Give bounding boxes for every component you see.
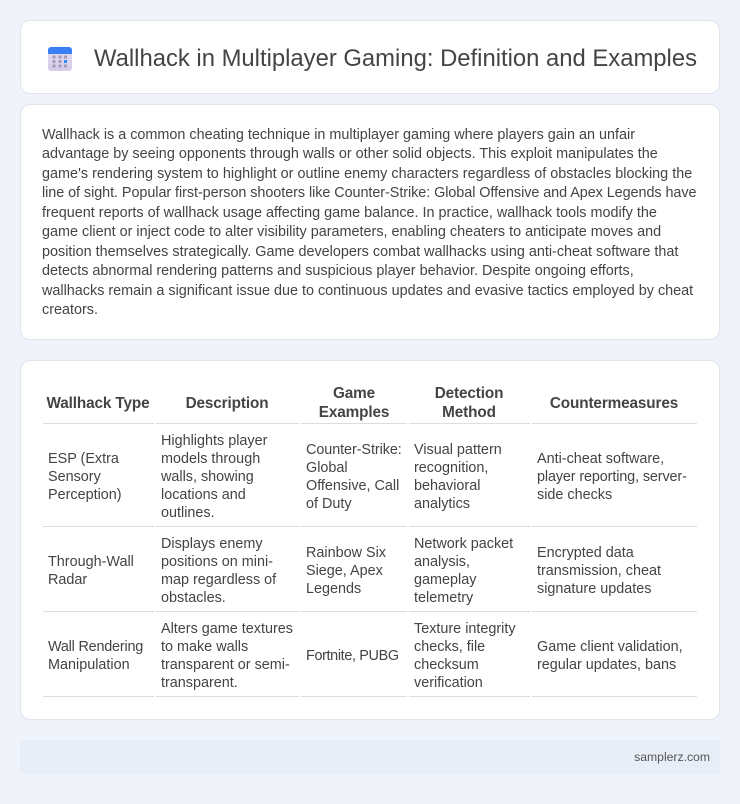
row: Through-Wall Radar: telemetry bbox=[414, 590, 473, 606]
row: Through-Wall Radar: Displays enemy bbox=[161, 536, 263, 552]
row: ESP: walls, showing bbox=[161, 469, 254, 485]
row: ESP: behavioral bbox=[414, 478, 480, 494]
row: ESP: player reporting, server- bbox=[537, 469, 687, 485]
row: ESP: Counter-Strike: bbox=[306, 442, 402, 458]
row: Wall Rendering Manipulation: Texture integrity bbox=[414, 621, 516, 637]
row: ESP: Anti-cheat software, bbox=[537, 451, 664, 467]
row: Wall Rendering Manipulation: Wall Rendering bbox=[48, 639, 143, 655]
row: ESP: ESP (Extra bbox=[48, 451, 119, 467]
row: ESP: Visual pattern bbox=[414, 442, 502, 458]
text block: intro: creators. bbox=[42, 302, 98, 318]
table header row: Wallhack Type bbox=[46, 395, 150, 412]
table header row: Countermeasures bbox=[550, 395, 678, 412]
text block: intro: line of sight. Popular first-person shooters like Counter-Strike: Global Offensive and Apex Legends have bbox=[42, 185, 696, 201]
row: Wall Rendering Manipulation: transparent or semi- bbox=[161, 657, 290, 673]
text block: intro: wallhacks remain a significant issue due to continuous updates and evasive tactics employed by cheat bbox=[42, 282, 693, 298]
row: Wall Rendering Manipulation: checksum bbox=[414, 657, 479, 673]
row: ESP: Sensory bbox=[48, 469, 101, 485]
row: ESP: outlines. bbox=[161, 505, 215, 521]
row: Wall Rendering Manipulation: to make walls bbox=[161, 639, 248, 655]
row: ESP: locations and bbox=[161, 487, 246, 503]
row: Through-Wall Radar: map regardless of bbox=[161, 572, 276, 588]
text block: intro: position themselves strategically. Game developers combat wallhacks using anti-cheat software that bbox=[42, 244, 678, 260]
row: Through-Wall Radar: Radar bbox=[48, 572, 87, 588]
row: Through-Wall Radar: Through-Wall bbox=[48, 554, 134, 570]
row: ESP: side checks bbox=[537, 487, 612, 503]
text block: intro: detects abnormal rendering patterns and suspicious player behavior. Despite ongoing efforts, bbox=[42, 263, 634, 279]
row: Through-Wall Radar: Legends bbox=[306, 581, 361, 597]
text block: intro: advantage by seeing opponents through walls or other solid objects. This exploit manipulates the bbox=[42, 146, 658, 162]
row: Through-Wall Radar: analysis, bbox=[414, 554, 470, 570]
row: Wall Rendering Manipulation: Alters game textures bbox=[161, 621, 293, 637]
text block: intro: frequent reports of wallhack usage affecting game balance. In practice, wallhack tools modify the bbox=[42, 205, 657, 221]
row: ESP: Global bbox=[306, 460, 348, 476]
row: Through-Wall Radar: signature updates bbox=[537, 581, 651, 597]
row: Wall Rendering Manipulation: verification bbox=[414, 675, 483, 691]
panel: intro paragraph bbox=[20, 104, 720, 340]
table header row: Description bbox=[186, 395, 268, 412]
row: ESP: analytics bbox=[414, 496, 470, 512]
row: Wall Rendering Manipulation: Fortnite, PUBG bbox=[306, 648, 399, 664]
panel: comparison table bbox=[20, 360, 720, 720]
row: Through-Wall Radar: Encrypted data bbox=[537, 545, 634, 561]
text block: intro: game's rendering system to highlight or outline enemy characters regardless of obstacles blocking the bbox=[42, 166, 692, 182]
row: Through-Wall Radar: Siege, Apex bbox=[306, 563, 383, 579]
text block: intro: Wallhack is a common cheating technique in multiplayer gaming where players gain an unfair bbox=[42, 127, 635, 143]
text block: intro: game client or inject code to alter visibility parameters, enabling cheaters to anticipate moves and bbox=[42, 224, 661, 240]
row: Wall Rendering Manipulation: Manipulation bbox=[48, 657, 130, 673]
table header row: Game bbox=[333, 385, 375, 402]
footer credit: samplerz.com bbox=[634, 750, 710, 764]
row: ESP: Perception) bbox=[48, 487, 122, 503]
title: Wallhack in Multiplayer Gaming: Definition and Examples bbox=[94, 45, 697, 72]
row: Through-Wall Radar: Network packet bbox=[414, 536, 513, 552]
row: Through-Wall Radar: positions on mini- bbox=[161, 554, 273, 570]
row: ESP: Offensive, Call bbox=[306, 478, 399, 494]
row: ESP: Highlights player bbox=[161, 433, 267, 449]
row: Wall Rendering Manipulation: transparent. bbox=[161, 675, 238, 691]
icon: calendar bbox=[48, 47, 72, 71]
row: ESP: of Duty bbox=[306, 496, 352, 512]
table header row: Examples bbox=[319, 404, 389, 421]
row: Wall Rendering Manipulation: checks, file bbox=[414, 639, 485, 655]
row: ESP: recognition, bbox=[414, 460, 488, 476]
row: Through-Wall Radar: gameplay bbox=[414, 572, 476, 588]
table header row: Method bbox=[442, 404, 496, 421]
row: Wall Rendering Manipulation: regular updates, bans bbox=[537, 657, 676, 673]
row: ESP: models through bbox=[161, 451, 260, 467]
row: Wall Rendering Manipulation: Game client validation, bbox=[537, 639, 683, 655]
row: Through-Wall Radar: obstacles. bbox=[161, 590, 226, 606]
row: Through-Wall Radar: transmission, cheat bbox=[537, 563, 661, 579]
text block: intro bbox=[42, 127, 696, 318]
footer bar bbox=[20, 740, 720, 774]
header card bbox=[20, 20, 720, 94]
table header row: Detection bbox=[435, 385, 503, 402]
row: Through-Wall Radar: Rainbow Six bbox=[306, 545, 386, 561]
